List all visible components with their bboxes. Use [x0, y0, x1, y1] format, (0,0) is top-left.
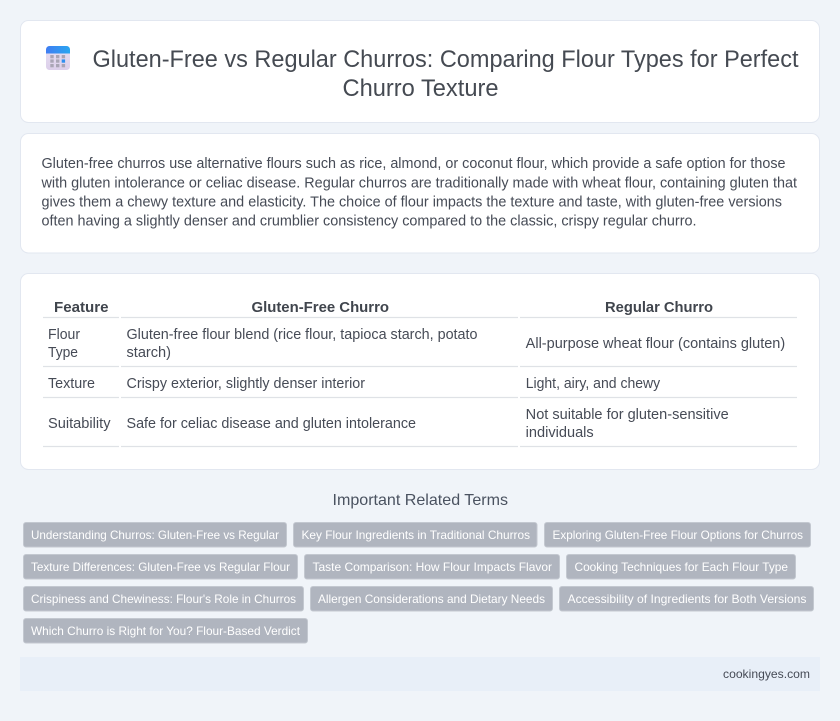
- title: Gluten-Free vs Regular Churros: Comparing Flour Types for Perfect: [92, 46, 799, 73]
- footer: [20, 657, 820, 691]
- tag: Key Flour Ingredients in Traditional Churros: [302, 528, 530, 542]
- text block: description: [40, 156, 797, 230]
- table row: suitability: Suitability: [48, 416, 111, 432]
- text block: description: often having a slightly denser and crumblier consistency compared to the classic, crispy regular churro.: [42, 214, 696, 230]
- table row: flour type: Type: [48, 345, 78, 361]
- table row: suitability: individuals: [526, 425, 594, 441]
- tag: Exploring Gluten-Free Flour Options for Churros: [552, 528, 803, 542]
- title: Churro Texture: [342, 75, 498, 102]
- footer: cookingyes.com: [723, 667, 810, 681]
- table row: texture: Crispy exterior, slightly denser interior: [126, 376, 365, 392]
- tag: Which Churro is Right for You? Flour-Based Verdict: [31, 624, 301, 638]
- tag: Crispiness and Chewiness: Flour's Role in Churros: [31, 592, 296, 606]
- tag: Accessibility of Ingredients for Both Versions: [568, 592, 806, 606]
- panel: description: [20, 134, 820, 253]
- tag: [294, 522, 537, 547]
- table header row: Feature: [54, 300, 108, 316]
- tag: [304, 554, 560, 579]
- tag: [566, 554, 796, 579]
- table header row: Regular Churro: [605, 300, 713, 316]
- tag: Understanding Churros: Gluten-Free vs Regular: [31, 528, 279, 542]
- table row: suitability: Not suitable for gluten-sensitive: [526, 407, 729, 423]
- text block: description: with gluten intolerance or celiac disease. Regular churros are traditionally made with wheat flour, containing gluten that: [40, 175, 797, 191]
- tag: Texture Differences: Gluten-Free vs Regular Flour: [31, 560, 290, 574]
- table row: flour type: [48, 327, 785, 361]
- icon: calendar: [46, 46, 70, 70]
- table row: flour type: All-purpose wheat flour (contains gluten): [526, 336, 785, 352]
- tag: Taste Comparison: How Flour Impacts Flavor: [312, 560, 552, 574]
- table row: texture: [48, 376, 661, 392]
- table row: flour type: starch): [126, 345, 171, 361]
- table header row: Gluten-Free Churro: [252, 300, 389, 316]
- table row: texture: Light, airy, and chewy: [526, 376, 661, 392]
- title: [92, 46, 799, 102]
- tag: [560, 586, 814, 611]
- tag: [310, 586, 552, 611]
- tag: Allergen Considerations and Dietary Needs: [318, 592, 545, 606]
- tag: [24, 586, 304, 611]
- panel: header: [20, 20, 820, 122]
- panel: comparison table: [20, 274, 820, 470]
- tag: [24, 554, 298, 579]
- table row: flour type: Gluten-free flour blend (rice flour, tapioca starch, potato: [126, 327, 478, 343]
- table row: flour type: Flour: [48, 327, 80, 343]
- table row: texture: Texture: [48, 376, 95, 392]
- tag: [24, 618, 308, 643]
- table row: suitability: [48, 407, 729, 441]
- tag: Cooking Techniques for Each Flour Type: [574, 560, 788, 574]
- tag: [544, 522, 810, 547]
- table header row: [54, 300, 713, 316]
- heading: related terms: Important Related Terms: [332, 492, 508, 509]
- text block: description: gives them a chewy texture and elasticity. The choice of flour impacts the texture and taste, with gluten-free versions: [42, 194, 782, 210]
- table row: suitability: Safe for celiac disease and gluten intolerance: [126, 416, 416, 432]
- text block: description: Gluten-free churros use alternative flours such as rice, almond, or coconut flour, which provide a safe option for those: [42, 156, 786, 172]
- related term tags: [24, 522, 814, 643]
- tag: [24, 522, 286, 547]
